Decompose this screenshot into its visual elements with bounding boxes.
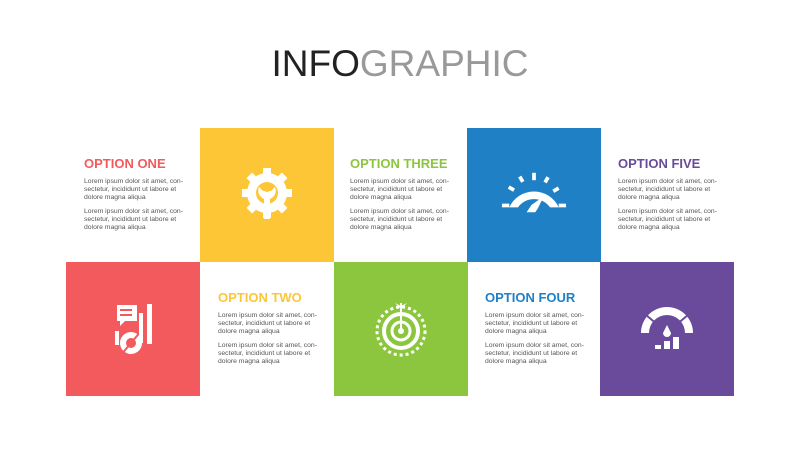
icon: report chart: [115, 304, 152, 354]
text: option four: dolore magna aliqua: [485, 328, 547, 335]
panel: yellow gear: [200, 128, 334, 262]
icon: gear wrench: [242, 168, 292, 219]
text: option two: Lorem ipsum dolor sit amet, con-: [218, 312, 317, 319]
text: option four: Lorem ipsum dolor sit amet, con-: [485, 342, 584, 349]
text: option two: dolore magna aliqua: [218, 358, 280, 365]
text: option five: OPTION FIVE: [618, 156, 700, 171]
text: option one: Lorem ipsum dolor sit amet, con-: [84, 178, 183, 185]
text: option four: OPTION FOUR: [485, 290, 575, 305]
panel: blue gauge: [467, 128, 601, 262]
text: option four: [485, 290, 584, 365]
text: option five: dolore magna aliqua: [618, 224, 680, 231]
text: option two: OPTION TWO: [218, 290, 302, 305]
text: option two: sectetur, incididunt ut labore et: [218, 350, 310, 357]
text: option one: dolore magna aliqua: [84, 194, 146, 201]
text: option one: dolore magna aliqua: [84, 224, 146, 231]
text: option three: sectetur, incididunt ut labore et: [350, 216, 442, 223]
icon: target: [376, 303, 426, 356]
text: option one: sectetur, incididunt ut labore et: [84, 186, 176, 193]
text: option one: Lorem ipsum dolor sit amet, con-: [84, 208, 183, 215]
text: option four: sectetur, incididunt ut labore et: [485, 350, 577, 357]
text: option three: sectetur, incididunt ut labore et: [350, 186, 442, 193]
panel: red report: [66, 262, 200, 396]
text: option two: dolore magna aliqua: [218, 328, 280, 335]
text: option one: [84, 156, 183, 231]
text: option two: sectetur, incididunt ut labore et: [218, 320, 310, 327]
icon: speedometer: [502, 172, 566, 212]
text: option three: OPTION THREE: [350, 156, 448, 171]
text: option one: OPTION ONE: [84, 156, 166, 171]
text: option two: Lorem ipsum dolor sit amet, con-: [218, 342, 317, 349]
panel: green target: [334, 262, 468, 396]
text: option four: sectetur, incididunt ut labore et: [485, 320, 577, 327]
text: option five: sectetur, incididunt ut labore et: [618, 186, 710, 193]
panel: purple gauge: [600, 262, 734, 396]
text: option three: Lorem ipsum dolor sit amet, con-: [350, 178, 449, 185]
text: option one: sectetur, incididunt ut labore et: [84, 216, 176, 223]
text: option five: sectetur, incididunt ut labore et: [618, 216, 710, 223]
text: option three: dolore magna aliqua: [350, 224, 412, 231]
icon: gauge bars: [641, 307, 693, 349]
title: INFOGRAPHIC: [272, 43, 528, 84]
text: option two: [218, 290, 317, 365]
text: option five: Lorem ipsum dolor sit amet, con-: [618, 178, 717, 185]
text: option five: [618, 156, 717, 231]
text: option four: Lorem ipsum dolor sit amet, con-: [485, 312, 584, 319]
text: option four: dolore magna aliqua: [485, 358, 547, 365]
text: option three: dolore magna aliqua: [350, 194, 412, 201]
text: option three: [350, 156, 449, 231]
text: option five: dolore magna aliqua: [618, 194, 680, 201]
text: option five: Lorem ipsum dolor sit amet, con-: [618, 208, 717, 215]
text: option three: Lorem ipsum dolor sit amet, con-: [350, 208, 449, 215]
